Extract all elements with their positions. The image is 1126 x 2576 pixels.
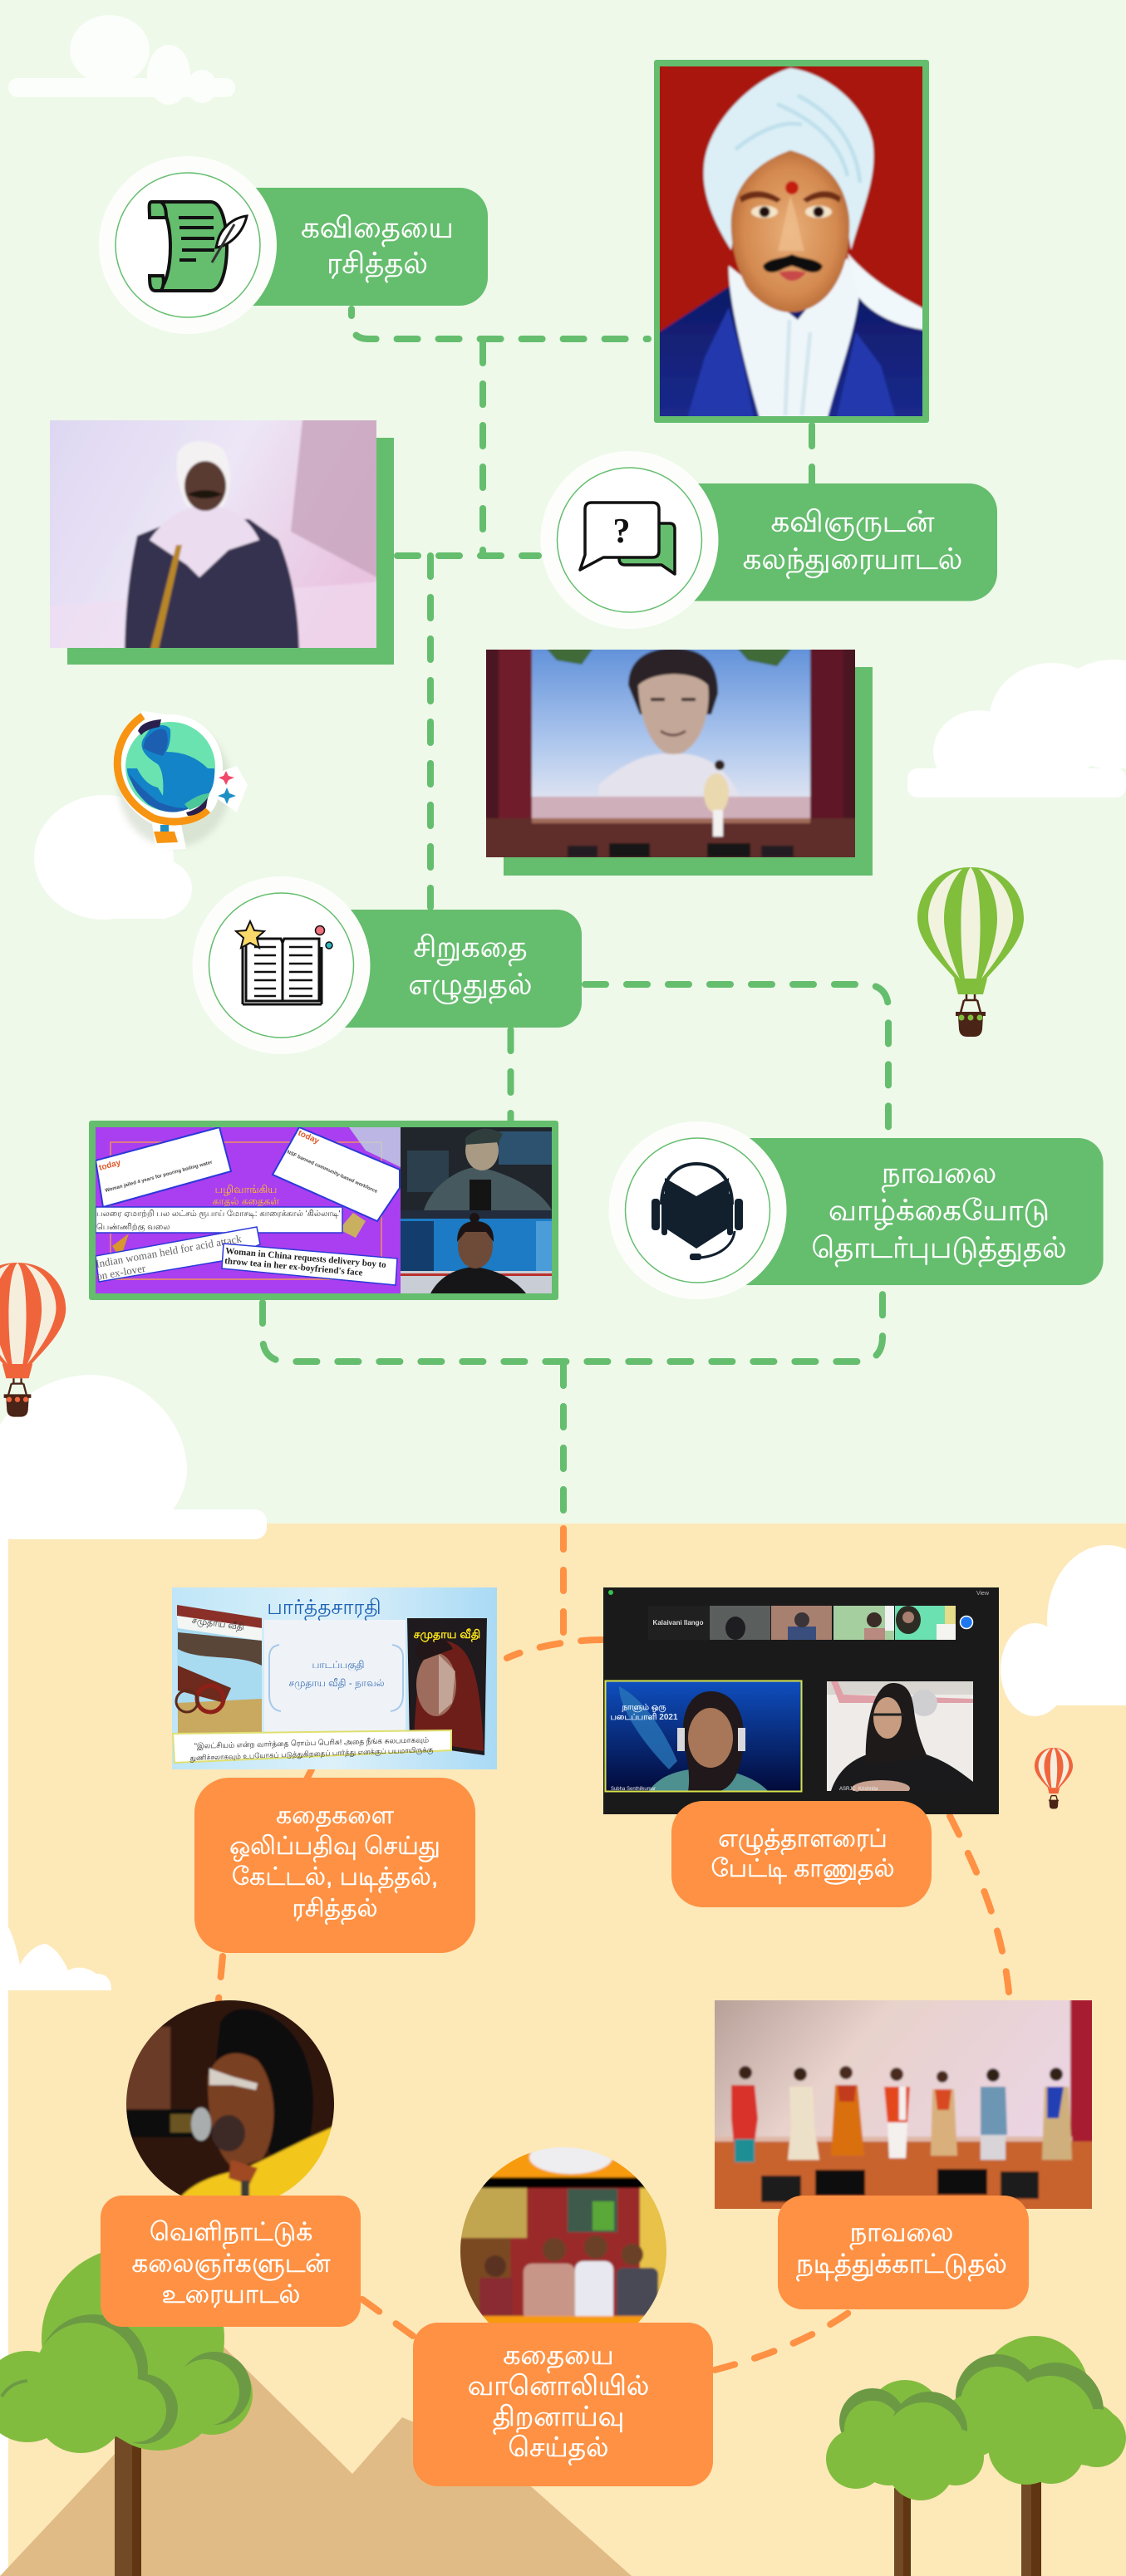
connector: short story to novel pill xyxy=(585,984,888,1137)
pill text: நாவலை xyxy=(882,1156,996,1193)
connector: orange vertical into zoom xyxy=(560,1528,567,1641)
photo: stage acting group xyxy=(715,2000,1092,2209)
book cover: cart xyxy=(176,1605,262,1734)
cloud: top left xyxy=(8,15,235,105)
globe sticker xyxy=(115,711,248,851)
pill text: கவிதையை xyxy=(301,211,454,248)
turban xyxy=(704,68,873,250)
pill text: ரசித்தல் xyxy=(293,1895,377,1925)
background: beige ground xyxy=(0,1524,1126,2576)
slide: novel lesson xyxy=(172,1587,497,1769)
performers xyxy=(731,2066,1072,2162)
connector: poem pill to portrait xyxy=(352,309,648,339)
image: news clippings with video panels: Woman jailed 4 years for pouring boiling water xyxy=(105,1160,214,1194)
pill text: வாழ்க்கையோடு xyxy=(829,1194,1050,1230)
slide quote xyxy=(173,1730,451,1763)
clipping 1 xyxy=(96,1127,231,1207)
icon circle: scroll and quill xyxy=(99,156,277,334)
pill text: கலந்துரையாடல் xyxy=(743,542,962,579)
mountains xyxy=(0,2343,632,2576)
image: zoom meeting screenshot: Subha Senthilkumar xyxy=(611,1787,656,1792)
connector: green to orange vertical xyxy=(560,1365,567,1520)
video: student one xyxy=(401,1127,552,1210)
photo: radio studio group xyxy=(460,2147,666,2323)
eyes xyxy=(751,206,778,218)
video: speaker left: படைப்பாளி 2021 xyxy=(610,1712,678,1722)
tree: right short xyxy=(826,2380,984,2576)
pill: poetry appreciation xyxy=(188,188,488,306)
pill: interviewing the writer xyxy=(671,1801,932,1907)
pill text: ஒலிப்பதிவு செய்து xyxy=(229,1833,440,1862)
pill text: தொடர்புபடுத்துதல் xyxy=(811,1231,1067,1268)
moustache xyxy=(763,254,823,272)
pill text: நடித்துக்காட்டுதல் xyxy=(796,2249,1007,2282)
connector: short story to news image xyxy=(507,1030,514,1120)
connector: zoom to novel acting xyxy=(950,1816,1009,1992)
image: zoom meeting screenshot: ASRJC_Krishnita xyxy=(839,1787,878,1792)
slide text: பாடப்பகுதி xyxy=(312,1659,365,1671)
pill text: திறனாய்வு xyxy=(493,2401,624,2435)
bindi xyxy=(785,181,799,194)
thumbnails row xyxy=(648,1606,709,1640)
clipping title: பழிவாங்கிய xyxy=(215,1183,277,1195)
pill text: கதைகளை xyxy=(276,1802,394,1832)
video: speaker left xyxy=(605,1681,802,1792)
icon circle: book with headset xyxy=(608,1121,786,1299)
tree: left xyxy=(0,2247,253,2576)
video: speaker right xyxy=(827,1681,973,1797)
video: speaker left: நாளும் ஒரு xyxy=(621,1703,666,1713)
connector: slide to story pill xyxy=(307,1769,312,1779)
connector: news image to novel pill loop xyxy=(263,1288,883,1362)
slide: novel lesson: சமுதாய வீதி - நாவல் xyxy=(288,1677,385,1690)
pill text xyxy=(132,2217,330,2309)
speakers xyxy=(761,2176,801,2202)
pill text xyxy=(408,930,533,1004)
pill text: பேட்டி காணுதல் xyxy=(711,1855,895,1885)
image: zoom meeting screenshot: Kalaivani Ilango xyxy=(653,1619,704,1627)
book cover: woman: சமுதாய வீதி xyxy=(414,1627,480,1642)
clipping 5 xyxy=(222,1244,397,1285)
pill: acting out the novel xyxy=(778,2196,1029,2309)
balloon: orange left xyxy=(0,1263,66,1417)
cloud: lower left xyxy=(0,1915,111,1990)
pill text: ரசித்தல் xyxy=(327,247,428,283)
pill text: எழுத்தாளரைப் xyxy=(718,1825,888,1855)
background: pale green sky xyxy=(0,0,1126,1524)
pill text xyxy=(229,1802,440,1925)
pill text: எழுதுதல் xyxy=(408,968,533,1004)
image: news clippings with video panels: today xyxy=(98,1158,122,1173)
pill text xyxy=(468,2339,649,2466)
pill: short story writing xyxy=(281,910,582,1028)
cloud: right xyxy=(907,660,1126,797)
image: news clippings with video panels: பெண்ணிற்கு வலை xyxy=(96,1223,170,1233)
balloon: small orange right xyxy=(1035,1748,1073,1808)
pill text: கவிஞருடன் xyxy=(771,505,935,541)
pill text xyxy=(796,2217,1007,2282)
slide title: பார்த்தசாரதி xyxy=(267,1596,381,1621)
connector: branch to discussion line xyxy=(479,342,486,556)
pill text: கலைஞர்களுடன் xyxy=(132,2249,330,2280)
cloud: left under globe xyxy=(34,795,192,920)
pill: talking with foreign artists xyxy=(101,2196,361,2327)
photo: performer dressed as poet xyxy=(42,412,394,665)
icon circle: open book with star xyxy=(193,876,371,1054)
photo: stage with projected face xyxy=(478,641,873,876)
book cover: cart: சமுதாய வீதி xyxy=(191,1616,245,1632)
image: news clippings with video panels: காதல் கதைகள் xyxy=(213,1195,279,1207)
pill text: சிறுகதை xyxy=(414,930,527,967)
connector: story pill to speaker circle xyxy=(219,1956,223,2000)
pill text: கதையை xyxy=(503,2339,614,2373)
studio people xyxy=(484,2255,506,2277)
clipping 4 xyxy=(96,1227,260,1282)
coat xyxy=(652,287,931,424)
pill text xyxy=(711,1825,895,1885)
tree: right tall xyxy=(941,2336,1126,2576)
pill text xyxy=(743,505,962,579)
connector: zoom to slide xyxy=(507,1640,602,1658)
book cover: woman xyxy=(407,1618,487,1755)
pill: radio review of story xyxy=(413,2323,713,2486)
pill: listening to recorded stories xyxy=(194,1778,475,1953)
balloon: green xyxy=(917,867,1024,1037)
clipping 3 xyxy=(96,1207,342,1233)
pill text xyxy=(301,211,454,283)
video: student two xyxy=(401,1210,552,1293)
photo: foreign artist at microphone xyxy=(126,2000,334,2196)
pill: discussion with poet xyxy=(629,483,997,601)
image: news clippings with video panels: Indian woman held for acid attack xyxy=(95,1232,243,1270)
cloud: bottom left xyxy=(0,1375,267,1539)
image: zoom meeting screenshot xyxy=(603,1587,999,1814)
image: news clippings with video panels: today xyxy=(297,1129,321,1146)
connector: portrait to discussion xyxy=(809,425,815,483)
connector: artists pill to radio pill xyxy=(362,2299,413,2336)
cloud: right of beige area xyxy=(1001,1545,1126,1716)
face xyxy=(731,150,849,312)
icon circle: speech bubbles xyxy=(540,451,718,629)
image: zoom meeting screenshot: View xyxy=(976,1591,990,1597)
slide: novel lesson: துணிச்சலாகவும் உபயோகப் படுத்துகிறதைப் பார்த்து எனக்குப் பயமாயிருக்கு xyxy=(189,1745,434,1764)
pill text: உரையாடல் xyxy=(162,2279,300,2309)
image: news clippings with video panels: Woman in China requests delivery boy to xyxy=(225,1246,387,1270)
photo: poet portrait xyxy=(648,58,931,424)
pill: novel connected to life xyxy=(698,1138,1104,1285)
pill text: கேட்டல், படித்தல், xyxy=(232,1863,438,1893)
pill text: நாவலை xyxy=(850,2217,953,2250)
clipping 2 xyxy=(273,1127,400,1221)
connector: discussion line to short story xyxy=(427,556,434,907)
pill text: வெளிநாட்டுக் xyxy=(150,2217,312,2249)
scarf xyxy=(729,258,860,424)
image: news clippings with video panels: NSF banned community-based workforce xyxy=(286,1150,378,1195)
pill text xyxy=(811,1156,1067,1268)
image: news clippings with video panels: throw tea in her ex-boyfriend's face xyxy=(224,1256,363,1278)
icon circle: speech bubbles: ? xyxy=(613,513,630,551)
connector: performer to discussion xyxy=(397,552,538,559)
image: news clippings with video panels: பலரை ஏமாற்றி பல லட்சம் ரூபாய் மோசடி: காரைக்கால் 'கில்லாடி' xyxy=(96,1209,341,1219)
connector: radio pill to acting pill xyxy=(715,2311,851,2370)
pill text: வானொலியில் xyxy=(468,2370,649,2401)
image: news clippings with video panels: on ex-lover xyxy=(96,1262,147,1283)
image: news clippings with video panels xyxy=(89,1121,558,1300)
slide: novel lesson: "இலட்சியம் என்ற வார்த்தை ரொம்ப பெரிசு! அதை நீங்க சுலபமாகவும் xyxy=(194,1735,429,1751)
pill text: செய்தல் xyxy=(508,2431,609,2466)
